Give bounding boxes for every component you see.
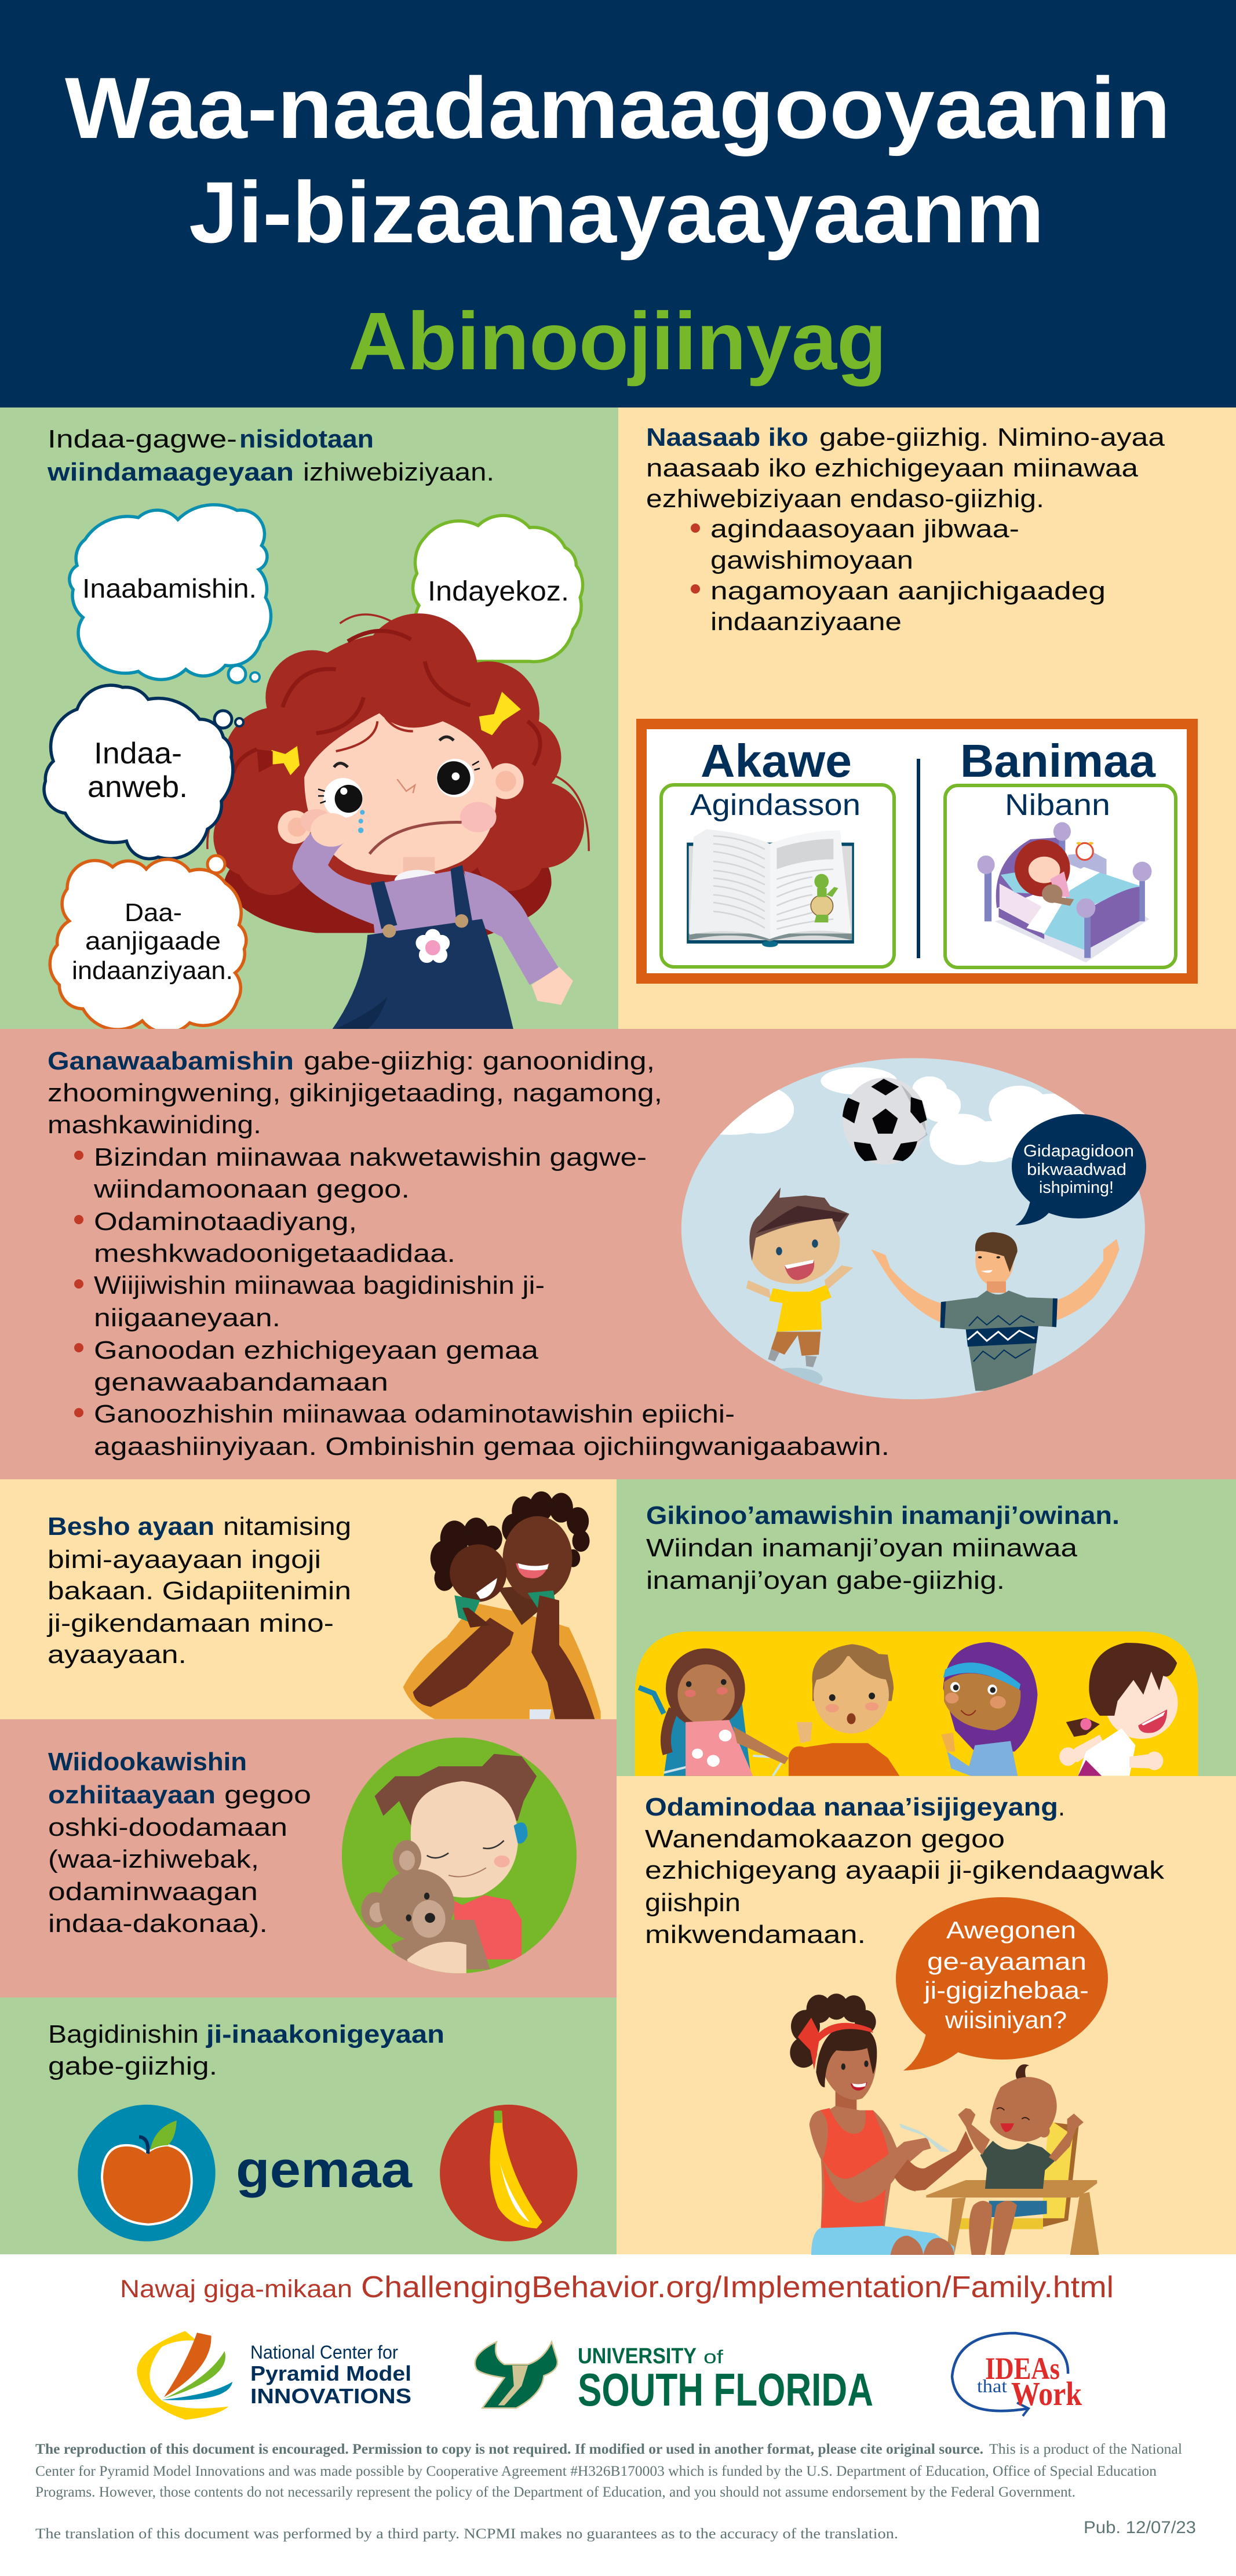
flower <box>415 929 450 963</box>
thought bubble: green <box>413 515 583 661</box>
eyes <box>323 778 363 818</box>
panel: prepare <box>0 1719 617 1998</box>
pretend play text: mikwendamaan. <box>645 1920 866 1949</box>
stay close text: nitamising <box>223 1512 351 1541</box>
panel: routine <box>618 407 1236 1029</box>
stay close text: ji-gikendamaan mino- <box>46 1609 334 1638</box>
play text: Wiijiwishin miinawaa bagidinishin ji- <box>94 1271 545 1300</box>
child in wheelchair <box>639 1649 789 1776</box>
emotions text: Wiindan inamanji’oyan miinawaa <box>646 1534 1078 1562</box>
choices text: Bagidinishin <box>48 2020 199 2049</box>
publication date: Pub. 12/07/23 <box>1084 2518 1196 2537</box>
play text: mashkawiniding. <box>48 1111 261 1139</box>
logo: Pyramid Model Innovations: Pyramid Model <box>250 2362 411 2385</box>
prepare text: indaa-dakonaa). <box>48 1909 268 1938</box>
heading: then: Banimaa <box>960 735 1156 787</box>
blanket <box>1042 872 1143 951</box>
website link: ChallengingBehavior.org/Implementation/Family.html <box>361 2271 1114 2304</box>
mattress <box>1000 883 1044 933</box>
prepare text: ozhiitaayaan <box>48 1781 216 1809</box>
disclaimer text: Center for Pyramid Model Innovations and was made possible by Cooperative Agreement #H326B170003 which is funded by the U.S. Department of Education, Office of Special Education <box>35 2464 1157 2479</box>
illustration: father hugging child <box>403 1491 601 1719</box>
sheet <box>1026 867 1100 934</box>
prepare text: (waa-izhiwebak, <box>48 1845 259 1873</box>
card: reading <box>661 785 894 967</box>
connector word: gemaa <box>236 2141 413 2198</box>
illustration: father and son playing ball <box>681 1058 1145 1399</box>
play text <box>48 1047 889 1461</box>
bed posts <box>1084 906 1091 958</box>
speech bubble: play: ishpiming! <box>1039 1178 1114 1197</box>
play text: Bizindan miinawaa nakwetawishin gagwe- <box>94 1143 647 1171</box>
routine text: agindaasoyaan jibwaa- <box>710 515 1019 543</box>
crying angry child <box>1059 1643 1178 1776</box>
card: reading: Agindasson <box>690 788 861 822</box>
logo: University of South Florida <box>475 2342 873 2415</box>
pretend play text: ezhichigeyang ayaapii ji-gikendaagwak <box>645 1856 1165 1884</box>
speech bubble: question: ji-gigizhebaa- <box>923 1977 1089 2004</box>
prepare text <box>48 1748 311 1938</box>
prepare text: odaminwaagan <box>48 1878 258 1906</box>
boy <box>746 1188 853 1367</box>
disclaimer text: The reproduction of this document is encouraged. Permission to copy is not required. If modified or used in another format, please cite original source. <box>35 2442 983 2457</box>
chair <box>926 2119 1099 2255</box>
routine text <box>646 423 1165 636</box>
logo: IDEAs that Work <box>952 2333 1082 2416</box>
thought bubble: navy <box>44 685 243 858</box>
card: sleeping: Nibann <box>1005 788 1110 822</box>
headboard <box>996 837 1064 908</box>
logo: Pyramid Model Innovations: INNOVATIONS <box>250 2384 411 2408</box>
heading: first: Akawe <box>701 735 852 787</box>
thought bubble: blue <box>70 505 271 683</box>
mother <box>790 1993 974 2255</box>
logo: University of South Florida: SOUTH FLORIDA <box>578 2364 873 2415</box>
routine text: indaanziyaane <box>710 607 902 636</box>
play text: zhoomingwening, gikinjigetaading, nagamong, <box>48 1079 662 1107</box>
feelings text: nisidotaan <box>239 425 374 453</box>
feelings text: wiindamaageyaan <box>47 458 294 486</box>
play text: Ganoodan ezhichigeyaan gemaa <box>94 1336 539 1365</box>
thought bubble: orange: Daa- <box>125 898 182 927</box>
illustration: four children with different emotions <box>635 1632 1198 1776</box>
play text: Odaminotaadiyang, <box>94 1207 357 1236</box>
prepare text: oshki-doodamaan <box>48 1813 287 1842</box>
panel: choices <box>0 1998 617 2254</box>
feelings text: izhiwebiziyaan. <box>303 458 494 486</box>
speech bubble: question: ge-ayaaman <box>927 1948 1086 1975</box>
stay close text: Besho ayaan <box>48 1512 214 1541</box>
clouds <box>698 1067 1088 1389</box>
speech bubble: play: Gidapagidoon <box>1023 1142 1134 1160</box>
thought bubble: navy: anweb. <box>87 770 188 804</box>
logo: IDEAs that Work: Work <box>1011 2375 1082 2413</box>
man <box>871 1232 1120 1391</box>
pretend play text: . <box>1058 1793 1065 1821</box>
thought bubble: blue: Inaabamishin. <box>82 573 257 603</box>
website link: Nawaj giga-mikaan <box>120 2275 352 2303</box>
panel: play <box>0 1029 1236 1479</box>
icon: banana <box>440 2105 577 2242</box>
play text: wiindamoonaan gegoo. <box>93 1175 410 1203</box>
speech bubble: play <box>1012 1114 1146 1225</box>
surprised child <box>789 1644 899 1776</box>
prepare text: gegoo <box>224 1781 311 1809</box>
pretend play text: Wanendamokaazon gegoo <box>645 1825 1005 1853</box>
baby <box>958 2064 1084 2255</box>
logo: University of South Florida: UNIVERSITY <box>578 2344 697 2368</box>
logo: Pyramid Model Innovations <box>137 2331 411 2419</box>
logo: IDEAs that Work: that <box>977 2375 1007 2396</box>
play text: Ganoozhishin miinawaa odaminotawishin epiichi- <box>94 1400 735 1428</box>
routine text: gawishimoyaan <box>710 546 913 574</box>
disclaimer text <box>35 2442 1182 2542</box>
routine text: naasaab iko ezhichigeyaan miinawaa <box>646 454 1139 482</box>
emotions text: inamanji’oyan gabe-giizhig. <box>646 1566 1005 1595</box>
hair <box>207 613 589 937</box>
icon: girl in bed <box>978 822 1152 962</box>
play text: agaashiinyiyaan. Ombinishin gemaa ojichiingwanigaabawin. <box>94 1432 889 1461</box>
speech bubble: play: bikwaadwad <box>1027 1160 1126 1179</box>
disclaimer text: Programs. However, those contents do not necessarily represent the policy of the Department of Education, and you should not assume endorsement by the Federal Government. <box>35 2484 1075 2500</box>
icon: apple <box>78 2105 216 2242</box>
card: sleeping <box>945 785 1176 967</box>
neck and collar <box>403 857 435 877</box>
stay close text: bimi-ayaayaan ingoji <box>48 1545 321 1574</box>
choices text: gabe-giizhig. <box>48 2052 217 2080</box>
title <box>65 59 1171 261</box>
routine text: gabe-giizhig. Nimino-ayaa <box>819 423 1165 452</box>
illustration: crying girl <box>207 613 589 1031</box>
thought bubble: navy: Indaa- <box>94 737 182 770</box>
pretend play text: giishpin <box>645 1889 741 1917</box>
panel: feelings <box>0 407 618 1033</box>
play text: gabe-giizhig: ganooniding, <box>304 1047 655 1075</box>
speech bubble: question: Awegonen <box>946 1916 1076 1944</box>
disclaimer text: This is a product of the National <box>989 2442 1182 2457</box>
logo: IDEAs that Work: IDEAs <box>985 2351 1060 2386</box>
soccer ball <box>843 1078 928 1165</box>
choices text <box>48 2020 444 2080</box>
panel: pretend play <box>617 1776 1236 2255</box>
play text: niigaaneyaan. <box>94 1304 280 1332</box>
ears <box>278 810 311 844</box>
routine text: Naasaab iko <box>646 423 808 452</box>
thought bubble: orange: indaanziyaan. <box>72 956 233 985</box>
thought bubble: green: Indayekoz. <box>428 576 569 607</box>
choices text: ji-inaakonigeyaan <box>206 2020 444 2049</box>
emotions text <box>646 1501 1120 1595</box>
disclaimer text: The translation of this document was performed by a third party. NCPMI makes no guarantees as to the accuracy of the translation. <box>35 2526 898 2542</box>
stay close text: ayaayaan. <box>48 1640 187 1669</box>
play text: genawaabandamaan <box>94 1368 388 1396</box>
routine text: nagamoyaan aanjichigaadeg <box>710 577 1106 605</box>
pretend play text <box>645 1793 1165 1949</box>
logo: Pyramid Model Innovations: National Center for <box>250 2342 398 2363</box>
footboard <box>1090 887 1143 948</box>
stay close text: bakaan. Gidapiitenimin <box>48 1577 351 1605</box>
play text: meshkwadoonigetaadidaa. <box>94 1239 455 1268</box>
schedule card <box>636 719 1198 984</box>
pretend play text: Odaminodaa nanaa’isijigeyang <box>645 1793 1058 1821</box>
nightstand <box>1068 853 1107 875</box>
overalls <box>331 919 514 1031</box>
title: Waa-naadamaagooyaanin <box>65 59 1171 157</box>
bows <box>272 692 521 775</box>
routine text: ezhiwebiziyaan endaso-giizhig. <box>646 485 1044 513</box>
nose and mouth <box>397 779 415 793</box>
title: Ji-bizaanayaayaanm <box>189 163 1044 261</box>
logo: University of South Florida: of <box>703 2346 723 2367</box>
subtitle: Abinoojiinyag <box>348 295 887 387</box>
child in hijab <box>941 1642 1038 1776</box>
footer <box>35 2271 1196 2542</box>
prepare text: Wiidookawishin <box>48 1748 247 1776</box>
speech bubble: question: wiisiniyan? <box>945 2006 1067 2033</box>
illustration: girl with teddy bear <box>342 1738 577 1974</box>
icon: open book <box>687 829 854 947</box>
speech bubble: question <box>896 1897 1108 2071</box>
girl <box>1015 840 1070 897</box>
panel: stay close <box>0 1479 617 1719</box>
thought bubble: orange: aanjigaade <box>85 927 221 955</box>
feelings text: Indaa-gagwe- <box>48 425 237 453</box>
thought bubble: orange <box>50 856 246 1033</box>
header banner <box>0 0 1236 407</box>
stay close text <box>46 1512 351 1669</box>
tears <box>358 810 364 833</box>
panel: emotions <box>617 1479 1236 1776</box>
shirt and sleeves <box>370 869 486 941</box>
emotions text: Gikinoo’amawishin inamanji’owinan. <box>646 1501 1120 1530</box>
play text: Ganawaabamishin <box>48 1047 294 1075</box>
face <box>304 714 497 875</box>
feelings text <box>47 425 494 486</box>
illustration: mother feeding baby <box>790 1993 1099 2255</box>
